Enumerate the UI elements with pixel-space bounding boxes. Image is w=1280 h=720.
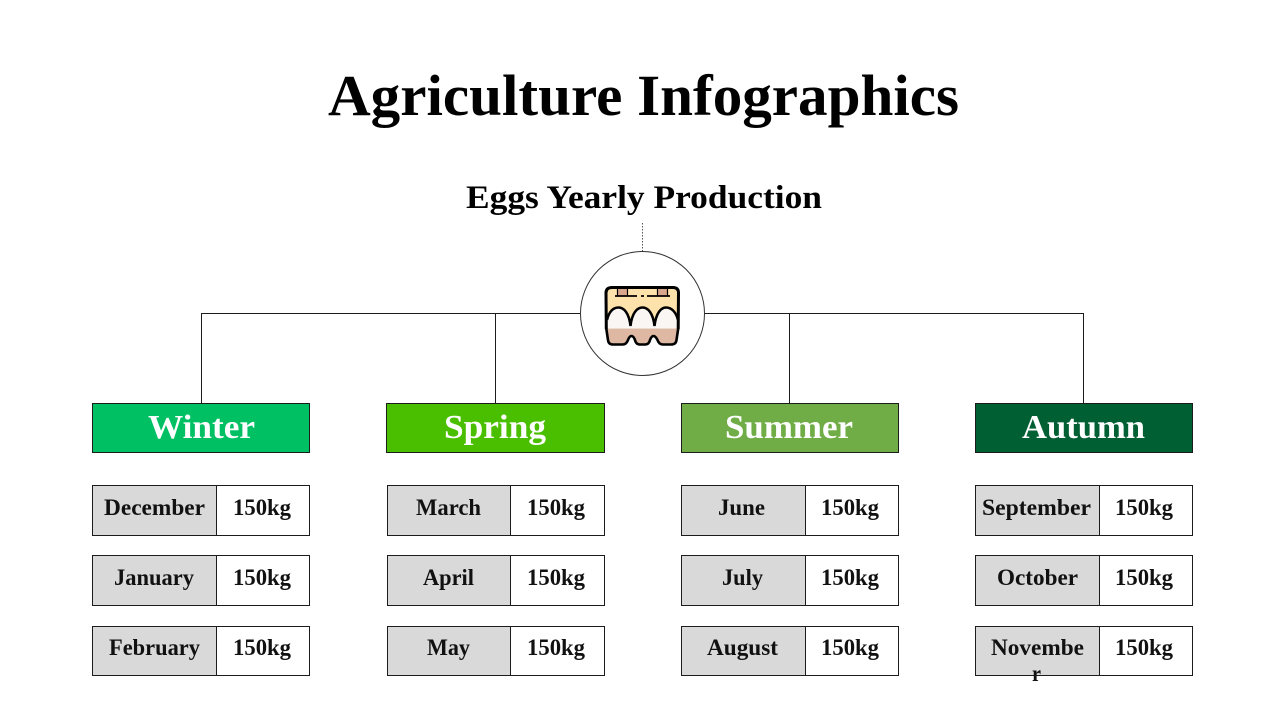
row: december — [92, 486, 310, 536]
row: november: r — [1032, 661, 1041, 686]
row: october: 150kg — [1115, 565, 1173, 590]
row: july — [682, 556, 898, 606]
row: april: April — [423, 565, 474, 590]
autumn heading — [976, 404, 1192, 452]
autumn heading: Autumn — [1022, 409, 1145, 446]
spring heading — [386, 404, 604, 452]
icon: egg carton in circle — [580, 252, 704, 376]
row: june — [682, 486, 898, 536]
row: may: 150kg — [527, 635, 585, 660]
panel: spring — [386, 404, 604, 676]
row: november: 150kg — [1115, 635, 1173, 660]
row: may: May — [427, 635, 470, 660]
row: february — [92, 626, 310, 676]
row: october: October — [997, 565, 1078, 590]
row: october — [976, 556, 1192, 606]
row: august: August — [707, 635, 778, 660]
row: march: March — [416, 495, 481, 520]
row: november: Novembe — [991, 635, 1084, 660]
row: may — [388, 626, 604, 676]
row: february: 150kg — [233, 635, 291, 660]
panel: autumn — [976, 404, 1192, 686]
row: january: 150kg — [233, 565, 291, 590]
row: march: 150kg — [527, 495, 585, 520]
panel: winter — [92, 404, 310, 676]
spring heading: Spring — [444, 409, 546, 446]
row: june: June — [718, 495, 765, 520]
row: september — [976, 486, 1192, 536]
row: september: 150kg — [1115, 495, 1173, 520]
dotted connector — [642, 223, 644, 251]
summer heading: Summer — [725, 409, 853, 446]
row: june: 150kg — [821, 495, 879, 520]
row: december: 150kg — [233, 495, 291, 520]
row: august — [682, 626, 898, 676]
row: march — [388, 486, 604, 536]
row: february: February — [109, 635, 200, 660]
row: april: 150kg — [527, 565, 585, 590]
row: january — [92, 556, 310, 606]
subtitle: Eggs Yearly Production — [466, 180, 822, 216]
row: august: 150kg — [821, 635, 879, 660]
title: Agriculture Infographics — [328, 63, 959, 128]
winter heading — [92, 404, 310, 452]
row: july: July — [722, 565, 763, 590]
row: november — [976, 626, 1192, 686]
row: september: September — [982, 495, 1091, 520]
tree connector lines — [202, 314, 1084, 403]
summer heading — [682, 404, 898, 452]
panel: summer — [682, 404, 898, 676]
row: december: December — [104, 495, 205, 520]
row: july: 150kg — [821, 565, 879, 590]
row: april — [388, 556, 604, 606]
winter heading: Winter — [148, 409, 255, 446]
row: january: January — [114, 565, 194, 590]
